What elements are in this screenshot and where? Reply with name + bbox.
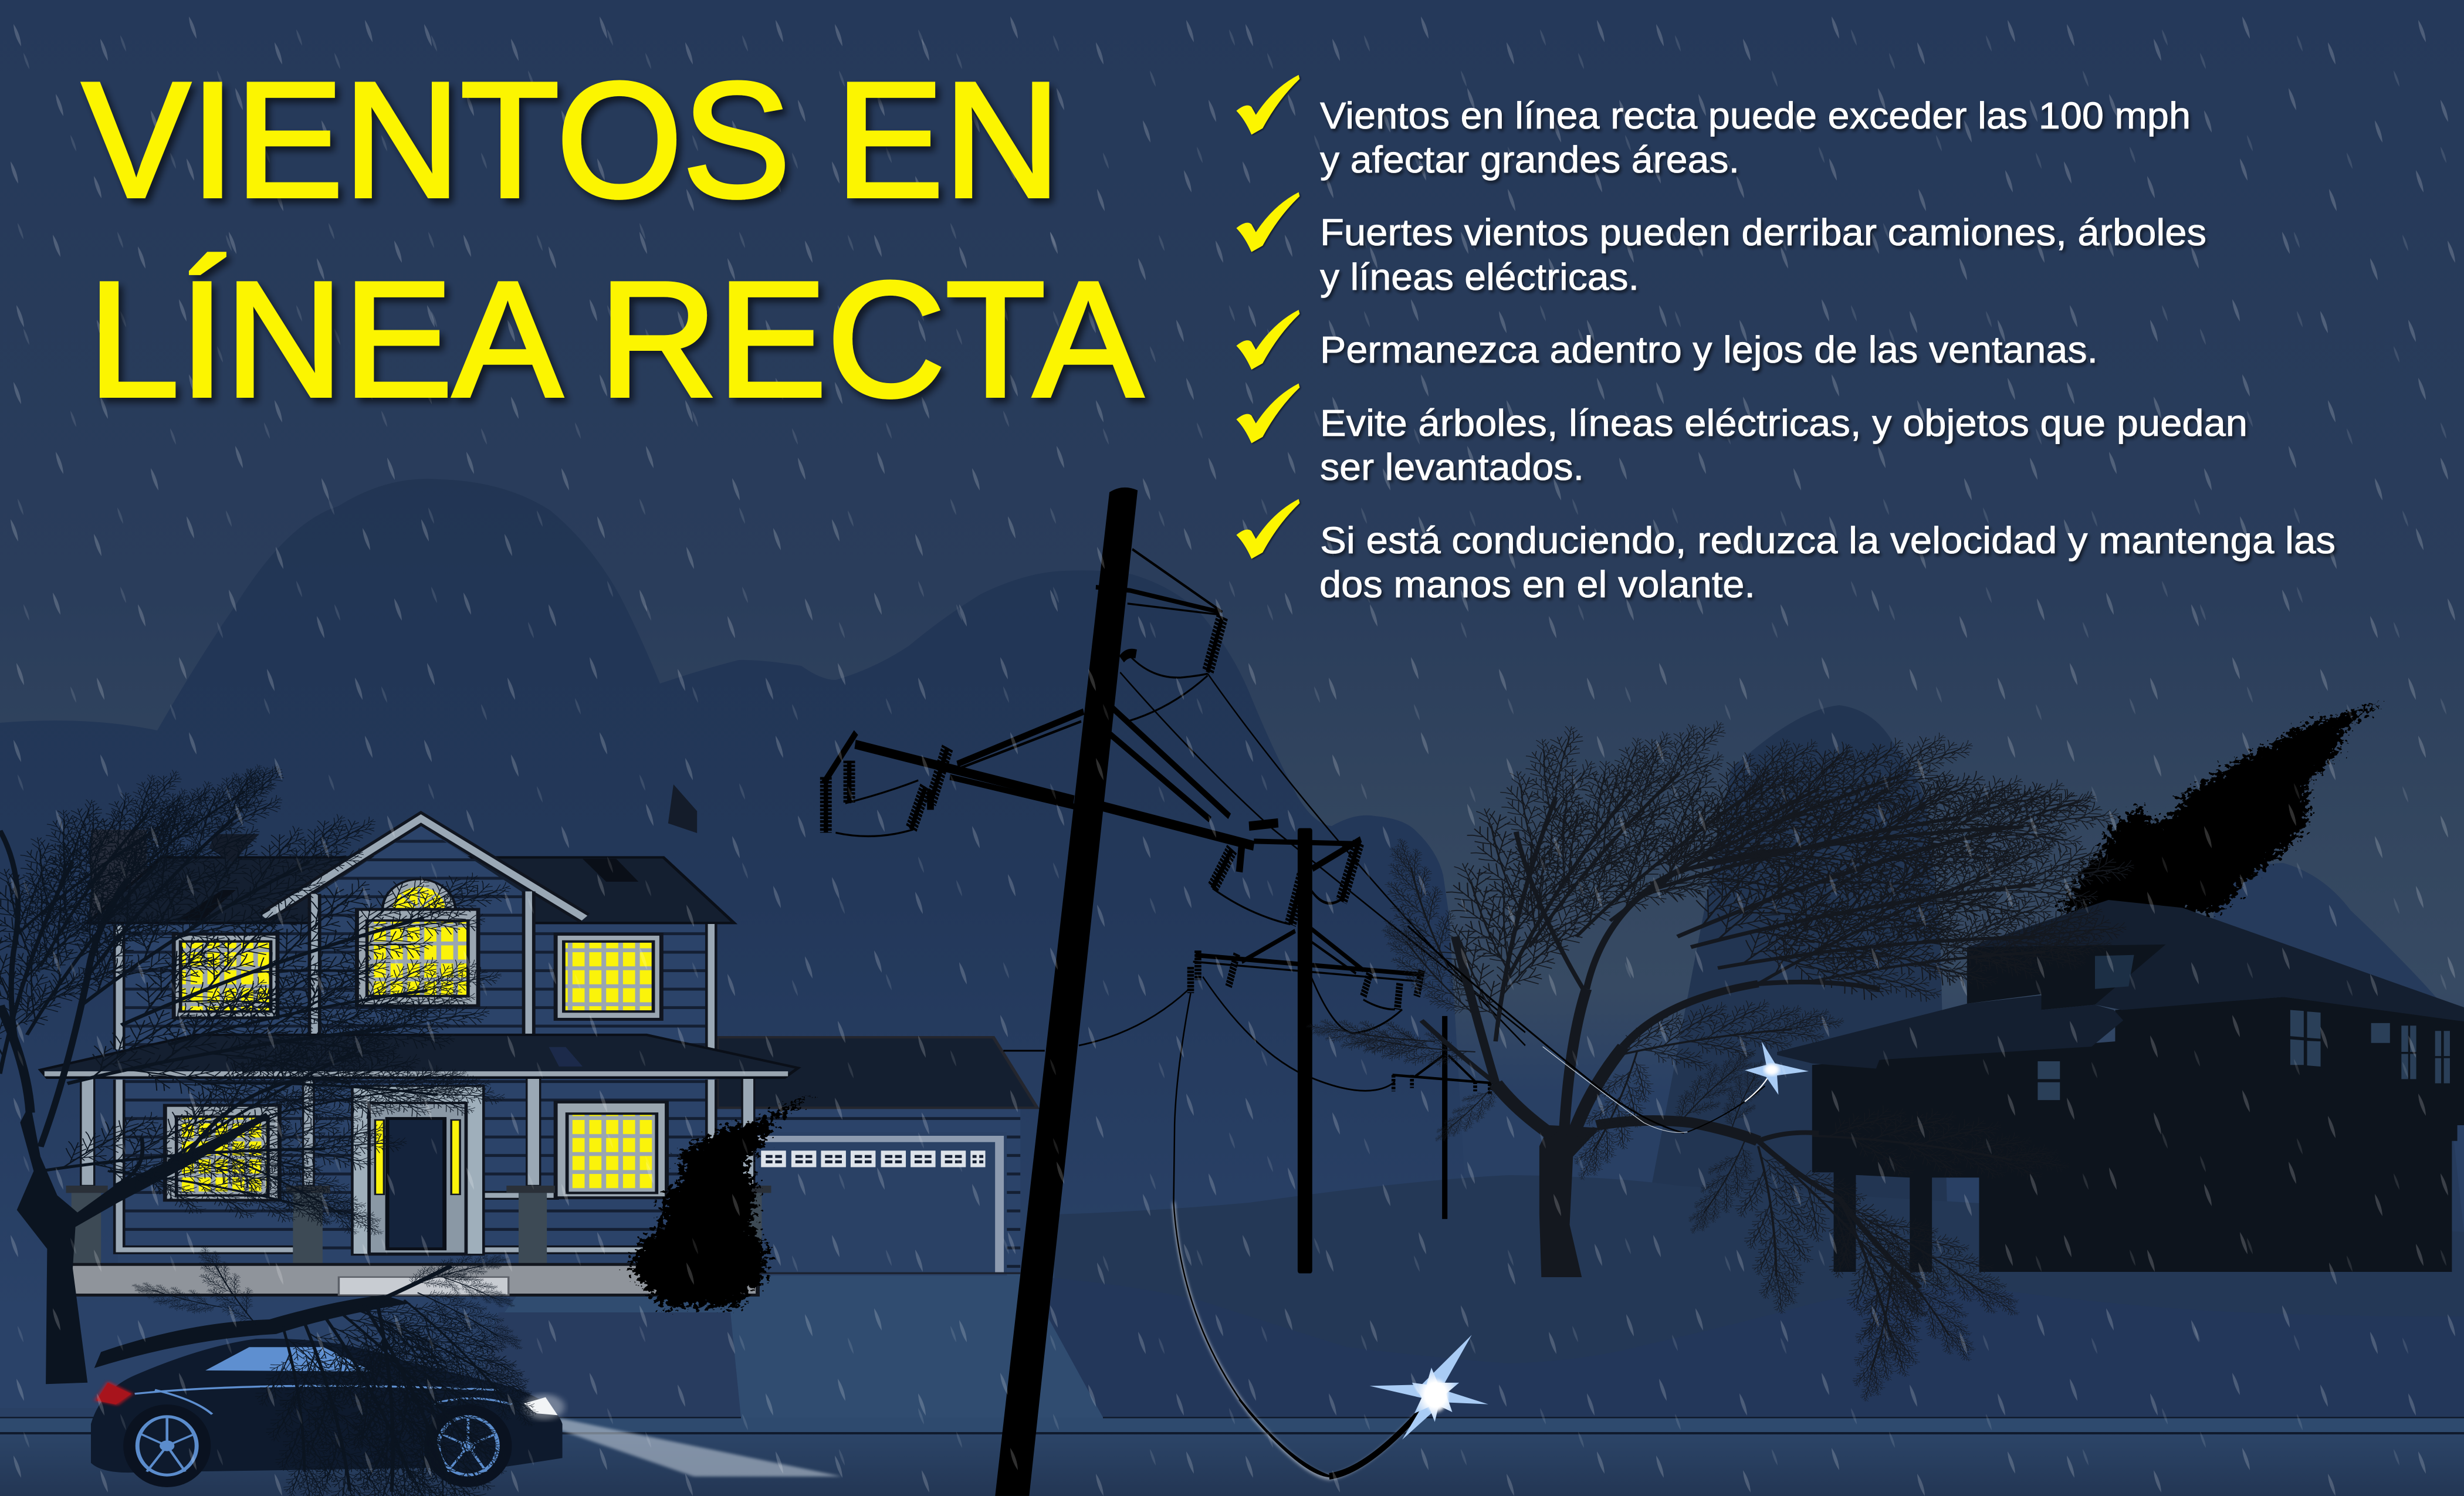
fallen branch on car bbox=[94, 1238, 574, 1496]
main leaning pole bbox=[995, 488, 1138, 1496]
front wheel bbox=[424, 1404, 512, 1487]
car body highlight bbox=[135, 1386, 512, 1414]
checkmark 3 bbox=[1236, 310, 1299, 370]
left tree fine twigs bbox=[0, 735, 546, 1258]
right mountain peak bbox=[1643, 705, 1948, 1232]
rear wheel bbox=[123, 1404, 211, 1487]
title bbox=[82, 49, 1143, 431]
title line 2: LÍNEA RECTA bbox=[88, 248, 1143, 431]
headlight beam bbox=[559, 1418, 842, 1477]
right house lower roof bbox=[1777, 996, 2123, 1069]
upper centre window bbox=[357, 909, 478, 1006]
car body bbox=[91, 1339, 563, 1473]
item 5 text bbox=[1319, 519, 2336, 605]
item 2 text bbox=[1320, 211, 2206, 298]
far pole bbox=[1393, 1016, 1497, 1219]
downed live wire bbox=[1174, 993, 1434, 1478]
left house and garage bbox=[40, 784, 1037, 1307]
front door bbox=[352, 1086, 483, 1255]
checkmark 4 bbox=[1236, 384, 1299, 443]
right house upper roof bbox=[1967, 900, 2464, 1021]
gable trim bbox=[119, 818, 711, 1147]
item 2 text: y líneas eléctricas. bbox=[1320, 256, 1639, 298]
house upper walls bbox=[118, 920, 714, 1266]
left crossarm bbox=[824, 712, 1084, 836]
overhead wires bbox=[1003, 672, 1525, 1091]
left tree trunk and limbs bbox=[0, 831, 350, 1384]
checkmark 5 bbox=[1236, 499, 1299, 559]
item 1 text: Vientos en línea recta puede exceder las 100 mph bbox=[1320, 94, 2191, 137]
garage bbox=[714, 1037, 1037, 1275]
tree trunk and limbs bbox=[1421, 832, 1920, 1288]
porch roof bbox=[40, 1035, 798, 1078]
item 5 text: Si está conduciendo, reduzca la velocidad y mantenga las bbox=[1320, 519, 2336, 561]
lower left window bbox=[165, 1105, 279, 1200]
front pine tree bbox=[629, 1094, 811, 1307]
item 5 text: dos manos en el volante. bbox=[1319, 563, 1755, 605]
item 1 text: y afectar grandes áreas. bbox=[1320, 138, 1739, 181]
background pine tree bbox=[2058, 705, 2378, 913]
car window bbox=[205, 1347, 374, 1372]
garage door windows bbox=[761, 1150, 986, 1167]
far right mountain bbox=[2171, 863, 2464, 1232]
checkmark 1 bbox=[1236, 75, 1299, 134]
chimney bbox=[91, 830, 147, 923]
headlight bbox=[524, 1395, 564, 1420]
ground hill ridge bbox=[1054, 1175, 2464, 1437]
item 4 text: ser levantados. bbox=[1320, 446, 1584, 488]
item 1 text bbox=[1320, 94, 2191, 181]
top crossarm bbox=[1096, 549, 1222, 722]
right house silhouette bbox=[1777, 705, 2464, 1272]
right house body bbox=[1812, 997, 2464, 1272]
checklist bbox=[1236, 75, 2336, 605]
middle pole bbox=[1191, 828, 1424, 1273]
tree fine twigs bbox=[1301, 685, 2152, 1407]
porch floor and steps bbox=[71, 1264, 757, 1295]
upper left window bbox=[174, 934, 277, 1018]
tree-contact wire bbox=[1408, 926, 1772, 1133]
checkmark 2 bbox=[1236, 192, 1299, 252]
front ground hill bbox=[1050, 1278, 2464, 1437]
road and sidewalk bbox=[0, 1417, 2464, 1496]
car with headlight bbox=[91, 1339, 842, 1487]
dormer window bbox=[2095, 955, 2134, 989]
item 4 text: Evite árboles, líneas eléctricas, y objetos que puedan bbox=[1320, 402, 2248, 444]
arched window bbox=[383, 879, 455, 909]
power poles and wires bbox=[824, 488, 1525, 1496]
right house windows bbox=[2037, 1010, 2450, 1100]
porch columns and bases bbox=[66, 1078, 771, 1264]
lawn shade bbox=[472, 1312, 741, 1418]
item 4 text bbox=[1320, 402, 2248, 488]
right wind-blown tree bbox=[1301, 685, 2152, 1407]
left and central mountains bbox=[0, 479, 1478, 1408]
right house dormer bbox=[1967, 945, 2166, 1010]
upper right window bbox=[556, 934, 661, 1019]
porch walls frame bbox=[119, 1079, 673, 1250]
tree spark bbox=[1745, 1041, 1809, 1095]
item 3 text: Permanezca adentro y lejos de las ventanas. bbox=[1320, 329, 2098, 371]
front gable wall bbox=[313, 826, 529, 1040]
right crossarm and braces bbox=[1103, 708, 1361, 925]
lower right window bbox=[556, 1102, 667, 1198]
loose shingles bbox=[175, 784, 697, 1067]
driveway bbox=[505, 1273, 1103, 1417]
tail light bbox=[94, 1381, 133, 1406]
main roof bbox=[87, 857, 734, 923]
left storm tree and fallen branch bbox=[0, 735, 574, 1496]
title line 1: VIENTOS EN bbox=[82, 49, 1061, 232]
ground spark bbox=[1370, 1335, 1488, 1440]
item 2 text: Fuertes vientos pueden derribar camiones, árboles bbox=[1320, 211, 2206, 253]
